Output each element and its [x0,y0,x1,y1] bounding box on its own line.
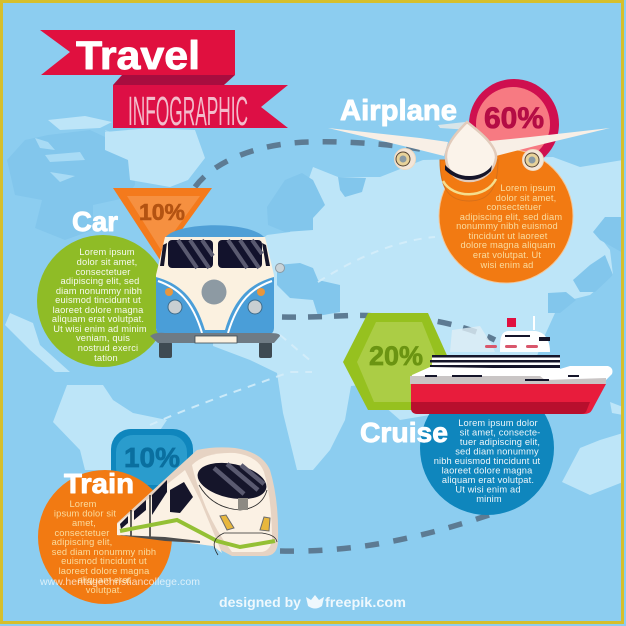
panel: car [37,188,284,367]
20% badge [343,313,450,410]
dashed route: car to airplane [195,142,420,187]
cruise text circle: laoreet dolore magna [442,466,533,476]
dashed route: car to cruise [282,315,495,340]
icon: airplane [328,122,610,201]
car text circle: aliquam erat volutpat. [52,314,144,324]
airplane text circle: wisi enim ad [480,260,533,270]
label: Airplane: Airplane [340,95,457,127]
footer credit: designed by [219,594,301,610]
airplane text circle: nonummy nibh euismod [456,221,558,231]
ribbon: Travel [40,30,235,75]
cruise text circle [420,381,554,515]
car text circle: adipiscing elit, sed [61,276,139,286]
footer credit: freepik.com [325,594,406,610]
cruise text circle: aliquam erat volutpat. [442,475,534,485]
cruise text circle: sed diam nonummy [455,446,539,456]
title: Travel: Travel [76,34,200,78]
car text circle: veniam, quis [76,333,130,343]
car text circle: euismod tincidunt ut [55,295,141,305]
label: Car: Car [72,206,118,237]
icon: van [150,225,284,358]
dashed route: train to cruise [280,515,489,551]
10% badge: 10% [124,442,180,473]
train text circle: Lorem [69,499,97,509]
world map [5,116,623,495]
train text circle: laoreet dolore magna [59,566,150,576]
car text circle [37,235,169,367]
airplane text circle [439,149,573,283]
label: Train: Train [64,468,134,499]
train text circle [38,470,172,604]
airplane text circle: tincidunt ut laoreet [469,231,548,241]
footer credit [219,594,406,610]
cruise text circle: nibh euismod tincidunt ut [434,456,541,466]
60% badge: 60% [484,102,544,135]
panel: train [38,429,278,604]
60% badge [469,79,559,169]
cruise text circle: Ut wisi enim ad [455,484,521,494]
panel: cruise [343,313,612,515]
train text circle: adipiscing elit, [52,537,112,547]
car text circle: laoreet dolore magna [53,305,144,315]
icon: train [117,447,278,556]
airplane text circle: consectetuer [486,202,542,212]
cruise text circle: Lorem ipsum dolor [458,418,538,428]
car text circle: dolor sit amet, [77,257,137,267]
airplane text circle: dolore magna aliquam [460,240,556,250]
car text circle: nostrud exerci [78,343,138,353]
10% badge [113,188,212,260]
car text circle: consectetuer [75,267,131,277]
train text circle: sed diam nonummy nibh [52,547,156,557]
train text circle: aliquam erat [78,575,131,585]
panel: airplane [328,79,610,283]
airplane text circle: erat volutpat. Ut [473,250,541,260]
car text circle: Lorem ipsum [79,247,135,257]
car text circle: Ut wisi enim ad minim [53,324,147,334]
train text circle: volutpat. [86,585,122,595]
cruise text circle: minim [476,494,502,504]
airplane text circle: dolor sit amet, [496,193,556,203]
title ribbon: INFOGRAPHIC [128,88,248,134]
icon: cruise ship [410,316,612,414]
train text circle: amet, [72,518,96,528]
10% badge: 10% [139,199,185,225]
ribbon: Infographic [113,85,288,128]
train text circle: euismod tincidunt ut [61,556,147,566]
airplane text circle: adipiscing elit, sed diam [460,212,562,222]
title ribbon [40,30,288,134]
10% badge [111,429,193,491]
car text circle: tation [94,353,118,363]
20% badge: 20% [369,341,423,371]
train text circle: ipsum dolor sit [54,508,116,518]
label: Cruise: Cruise [360,417,448,448]
icon: freepik logo [306,595,324,608]
airplane text circle: Lorem ipsum [500,183,556,193]
cruise text circle: tuer adipiscing elit, [460,437,540,447]
train text circle: consectetuer [54,528,110,538]
ribbon fold [113,75,235,85]
cruise text circle: sit amet, consecte- [460,428,540,438]
watermark url: www.heritagechristiancollege.com [39,576,200,588]
car text circle: diam nonummy nibh [56,286,142,296]
